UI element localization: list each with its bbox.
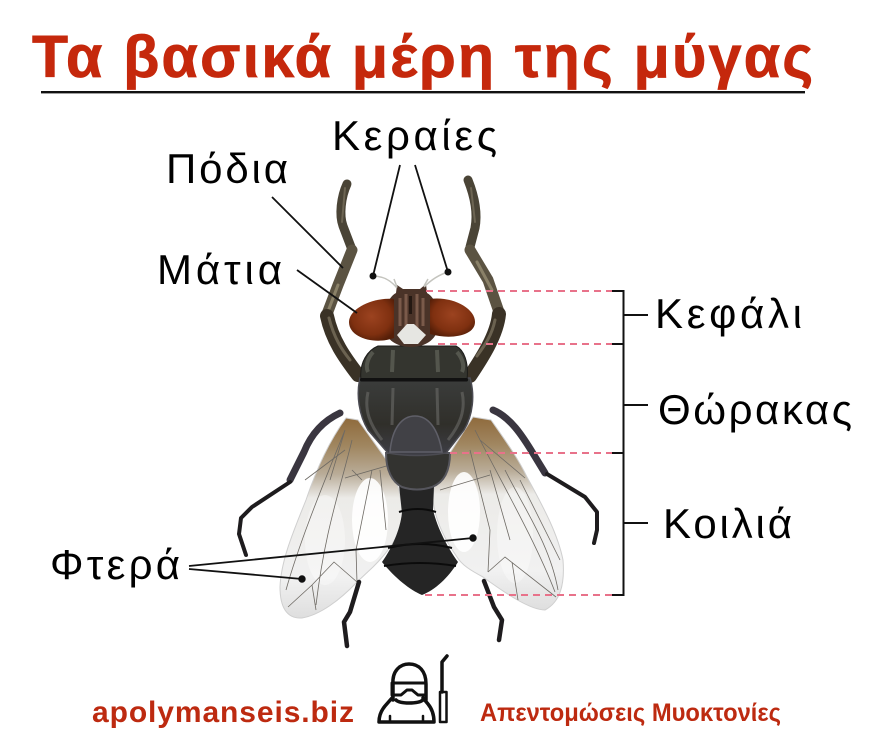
title: Τα βασικά μέρη της μύγας [32,24,813,90]
left front leg [239,180,597,646]
antenna leader lines [370,165,451,279]
label: thorax: Θώρακας [658,386,852,433]
thorax [358,378,473,456]
leg leader line [272,197,343,268]
footer services: Απεντομώσεις Μυοκτονίες [480,699,781,727]
right front leg [468,180,476,247]
eye leader line [297,270,357,313]
prothorax [361,346,467,380]
mouth [397,324,426,344]
left wing [280,418,402,618]
illustration: fly [239,180,597,646]
label: antennae: Κεραίες [332,112,497,159]
label: head: Κεφάλι [655,290,802,337]
bracket [612,291,648,595]
left eye [349,299,394,341]
dashed guide lines [425,291,614,595]
head [384,284,439,347]
hind legs [344,582,359,646]
right eye [430,299,475,337]
middle legs [290,413,340,480]
antennae [373,272,448,288]
footer website: apolymanseis.biz [92,696,354,729]
abdomen [382,485,458,595]
icon: pest control worker [379,656,447,722]
label: wings: Φτερά [50,541,180,588]
right wing [433,417,563,610]
label: eyes: Μάτια [157,246,282,293]
label: legs: Πόδια [166,145,288,192]
label: abdomen: Κοιλιά [663,500,792,547]
wing leader lines [189,535,476,582]
title underline [41,91,805,93]
upper abdomen [386,453,450,490]
